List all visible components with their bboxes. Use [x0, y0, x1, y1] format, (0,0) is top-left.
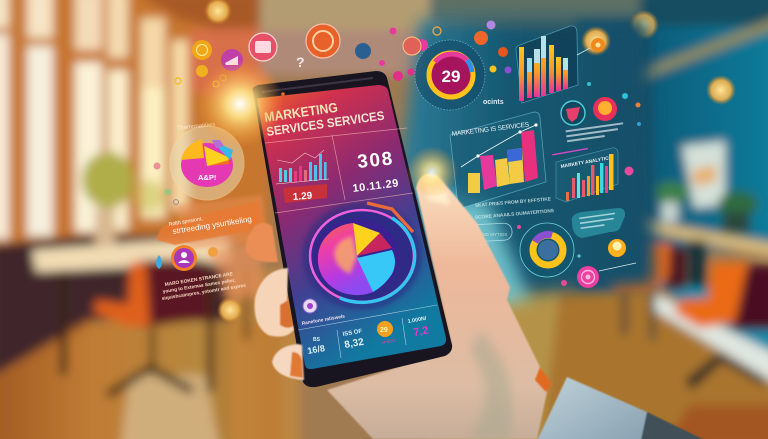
- big ring pie chart: [302, 202, 422, 310]
- phone: [253, 71, 452, 387]
- pendant lamps: [204, 0, 736, 323]
- bench: [650, 292, 768, 385]
- bottom stats: [307, 316, 430, 356]
- dividers: [265, 128, 413, 213]
- chart panel: marketing services: [450, 112, 546, 208]
- text: lower paragraph: siquishcaimpres, yntomtr and expres: [161, 283, 247, 302]
- bottom stats: 29: [380, 327, 388, 334]
- palm shadow: [470, 330, 512, 439]
- bar chart: top right: [516, 26, 578, 103]
- value box 1.29: [283, 184, 327, 203]
- centre ceiling and mid wall: [260, 0, 440, 34]
- button outline: STAND MYTIOS: [474, 232, 507, 237]
- right table and shelf: [628, 217, 768, 258]
- bottom stats: st 6DO: [381, 338, 396, 345]
- text: marketing label: Themonatitiws: [177, 122, 216, 132]
- text: callout body: strtreeding ysurtikeling: [172, 215, 252, 236]
- caption: Ranefone ratiswels: [301, 313, 346, 327]
- bottom stats: 8,32: [344, 337, 365, 351]
- pie chart: left: A&P!: [198, 173, 216, 182]
- text: lower paragraph: young to Extemas Sames pelter,: [162, 277, 237, 295]
- bottom stats: 16/8: [307, 343, 326, 356]
- bottom stats: 1.000N/: [407, 316, 427, 325]
- small bar chart panel: [556, 148, 618, 202]
- icon cluster around gauge: [416, 20, 512, 74]
- mini bar chart: [276, 150, 329, 184]
- gauge: 29: [415, 40, 485, 110]
- right plants: [653, 182, 689, 204]
- value box 1.29: 1.29: [292, 191, 313, 203]
- right chairs: [664, 246, 686, 290]
- bottom stats: ISS OF: [342, 329, 363, 338]
- pie chart: left: [170, 126, 244, 200]
- camera: [281, 92, 285, 96]
- small bar chart panel: MARKETY ANALYTICS: [560, 155, 613, 170]
- thumb highlight: [424, 174, 450, 205]
- caption under chart line two: SCORE ANAAILS OUMATERTIONS: [475, 208, 555, 221]
- left table: [32, 236, 232, 272]
- lamp node: [577, 26, 611, 56]
- phone body: [253, 71, 452, 387]
- icons: top centre: [296, 24, 421, 81]
- value 308: 308: [356, 148, 393, 173]
- caption under chart: SKAT PRIES FROM BY EFFSTIKE: [475, 196, 552, 209]
- wall picture: [682, 141, 725, 208]
- pink dot: [624, 166, 634, 176]
- gauge: 29: 29: [442, 67, 460, 86]
- hand: palm and thumb: [327, 174, 552, 439]
- scattered dots: [517, 82, 641, 286]
- icon: user badge: [156, 245, 218, 271]
- text: lower paragraph: MARO EOKEN STRANCE ARE: [164, 271, 234, 288]
- icon: target and arrow: [577, 263, 636, 288]
- right teal wall: [640, 0, 768, 250]
- wrist shadow: [535, 367, 552, 392]
- label: ocints: ocints: [483, 99, 504, 106]
- holographic panel: left: [154, 33, 277, 302]
- icons: top left cluster: [154, 33, 277, 204]
- small ring icon: [303, 299, 317, 313]
- title line one: MARKETING: [263, 100, 339, 125]
- left chair: [140, 260, 208, 328]
- pill callout: [572, 208, 625, 238]
- icons: top centre: ?: [296, 54, 305, 70]
- button outline: [466, 223, 512, 242]
- icon: orange badge: [593, 97, 617, 121]
- chart title: MARKETING IS SERVICES: [451, 121, 530, 138]
- callout banner: [157, 201, 264, 245]
- bottom dividers: [298, 305, 437, 358]
- title line two: SERVICES SERVICES: [265, 109, 385, 139]
- shirt cuff: [535, 377, 715, 439]
- ceiling beam: [630, 16, 768, 83]
- value date: 10.11.29: [352, 177, 399, 195]
- floor: [0, 322, 280, 439]
- holographic panel: right: [395, 20, 655, 310]
- screen content: [263, 100, 437, 358]
- left plant: [82, 152, 164, 244]
- pie slices: [318, 223, 373, 295]
- light flares: [196, 60, 458, 198]
- icon: bulb: [608, 239, 626, 257]
- donut chart: [520, 223, 574, 277]
- text block: right paragraph: [566, 122, 625, 142]
- dark lower wall: [0, 235, 230, 378]
- icon: shield: [561, 101, 585, 125]
- left window wall: [0, 0, 270, 245]
- bottom stats: 7,2: [412, 324, 430, 339]
- text: lower paragraph: [161, 271, 247, 302]
- hand: left fingers: [246, 223, 304, 380]
- bottom stats: BS: [313, 337, 321, 343]
- panel tint: [210, 238, 262, 300]
- phone screen: [257, 85, 446, 369]
- text: callout heading: Rolth spnsiont,: [168, 216, 203, 228]
- lower right floor: [430, 290, 660, 439]
